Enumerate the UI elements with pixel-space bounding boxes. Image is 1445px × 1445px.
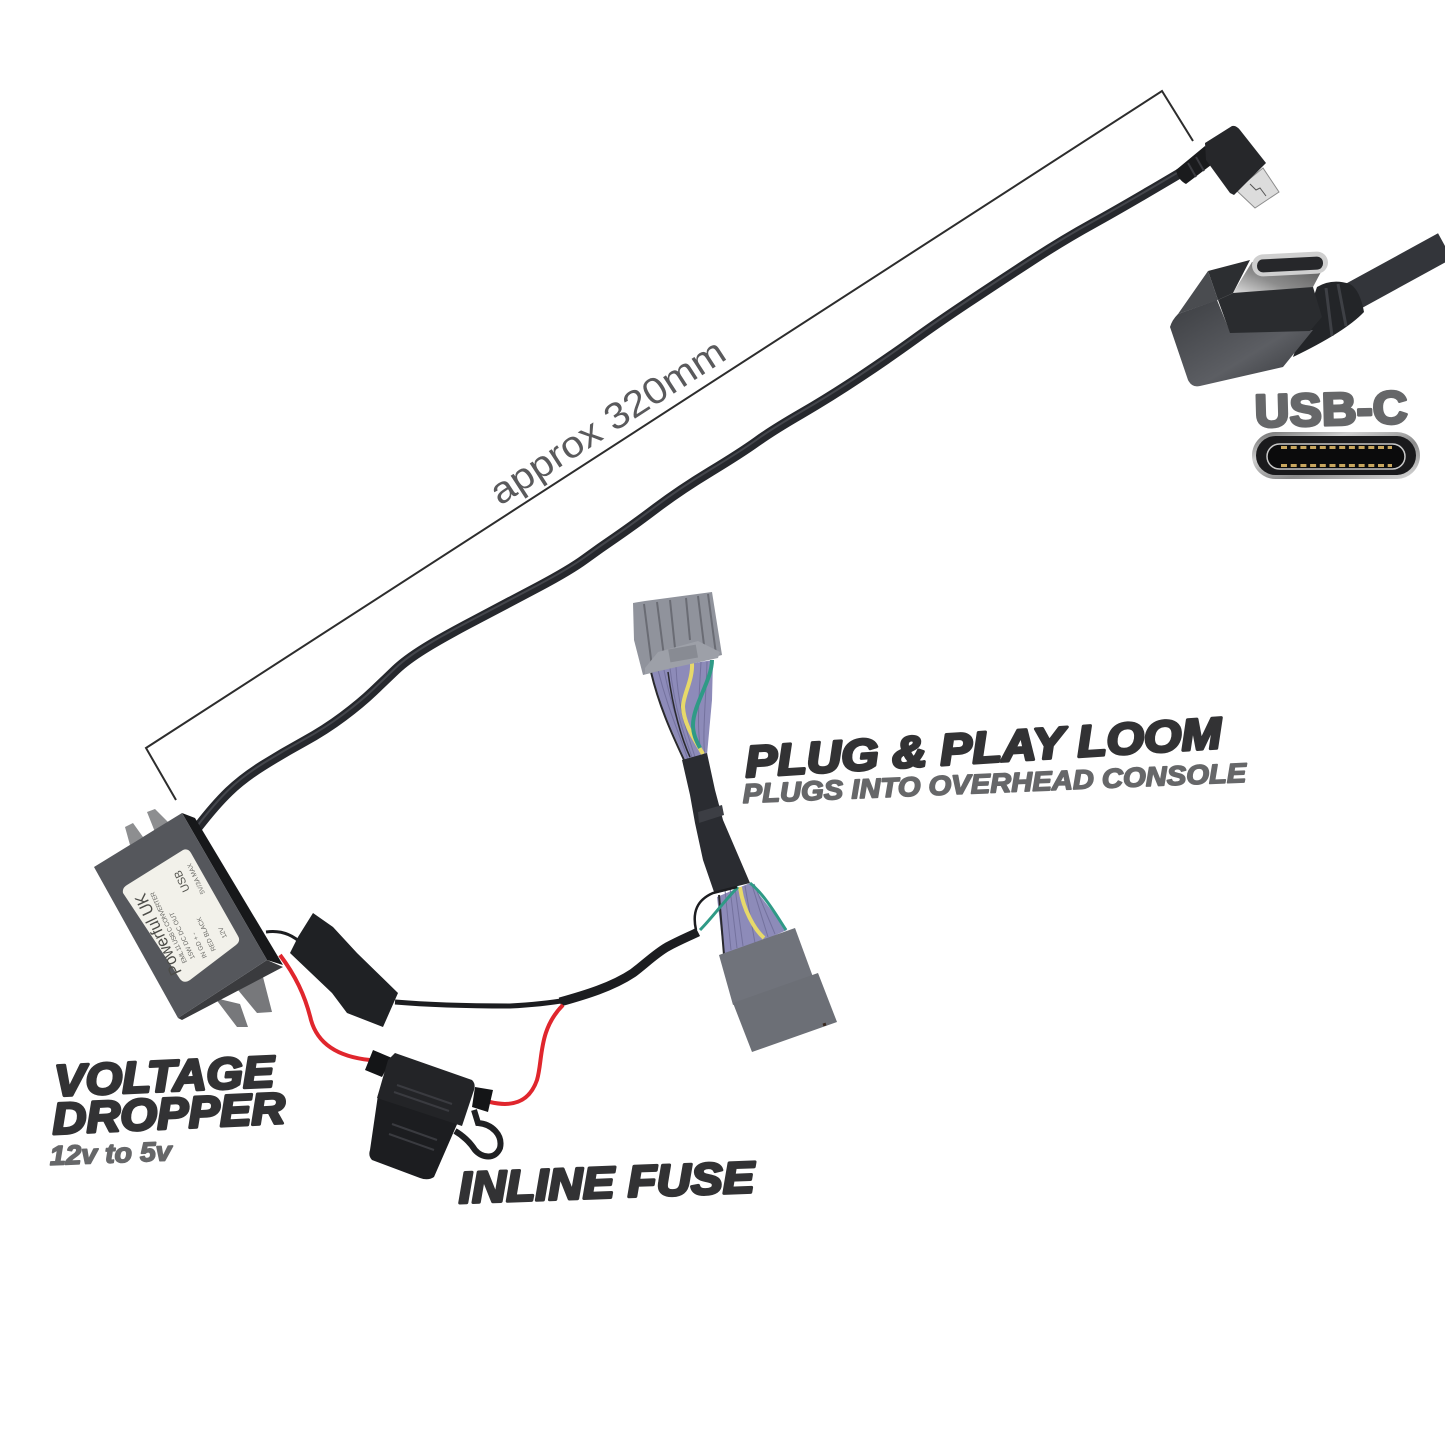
heading: voltage dropper: VOLTAGE xyxy=(53,1047,277,1106)
label text: 5V/3A MAX xyxy=(186,861,207,895)
top face xyxy=(94,813,267,1018)
left cap xyxy=(365,1050,392,1077)
side black face xyxy=(182,813,283,965)
label text: RED BLACK xyxy=(196,915,218,952)
heat-shrink block xyxy=(290,913,398,1027)
white label xyxy=(123,849,239,982)
upper body xyxy=(377,1053,475,1126)
upper wire bundle xyxy=(650,660,713,760)
heading: plug & play loom: PLUG & PLAY LOOM xyxy=(744,709,1224,787)
bottom edge face xyxy=(178,960,283,1020)
dimension bracket xyxy=(146,91,1193,800)
plug back face xyxy=(1208,260,1250,300)
voltage dropper module xyxy=(94,809,283,1027)
green wire top xyxy=(693,660,712,748)
label text: EML 11 USB C CONVERTER xyxy=(149,890,189,964)
inline fuse holder xyxy=(365,1050,500,1179)
red fused wire xyxy=(280,955,563,1104)
lower cover xyxy=(369,1095,458,1179)
label: USB-C: USB-C xyxy=(1254,381,1408,437)
label text: USB xyxy=(172,868,193,894)
plug dark band xyxy=(1218,287,1322,333)
yellow wire bottom xyxy=(740,887,764,938)
right cap xyxy=(472,1087,493,1112)
black power wire xyxy=(395,887,737,1006)
icon: USB-C port xyxy=(1252,432,1420,479)
strain relief xyxy=(1293,282,1364,357)
black wires into heat-shrink xyxy=(266,932,302,944)
strain relief xyxy=(1176,146,1215,184)
heading: voltage dropper: DROPPER xyxy=(51,1084,286,1144)
subheading: plugs into overhead console: PLUGS INTO OVERHEAD CONSOLE xyxy=(742,758,1248,809)
thick cable xyxy=(1350,246,1445,298)
black tape wrap xyxy=(682,753,750,892)
lower wire bundle xyxy=(717,883,787,958)
connector body xyxy=(1205,126,1266,195)
heading: voltage dropper xyxy=(51,1047,286,1144)
long black USB cable xyxy=(198,170,1182,827)
label text: 15W DC DC OUT xyxy=(169,911,197,960)
yellow wire top xyxy=(683,663,703,754)
label text: Powerful UK xyxy=(131,890,186,978)
large USB-C connector close-up xyxy=(1170,246,1445,386)
dimension label: approx 320mm: approx 320mm xyxy=(482,331,733,513)
small right-angle USB-C connector xyxy=(1176,126,1279,208)
label text: 12V xyxy=(217,925,229,939)
subheading: 12v to 5v: 12v to 5v xyxy=(49,1136,174,1171)
green wire bottom xyxy=(750,883,786,930)
metal tongue xyxy=(1233,262,1322,300)
plug and play loom xyxy=(633,592,837,1052)
gold pins xyxy=(1281,446,1392,449)
label text: IN GD + - xyxy=(191,931,209,959)
heading: inline fuse: INLINE FUSE xyxy=(458,1153,757,1213)
metal shell opening xyxy=(1251,251,1329,277)
metal tip xyxy=(1236,168,1279,208)
plug lower face xyxy=(1170,300,1313,386)
retaining loop xyxy=(455,1110,500,1156)
label text xyxy=(131,861,229,978)
lower connector xyxy=(719,928,813,1005)
top connector xyxy=(633,592,722,675)
mounting tabs xyxy=(125,823,143,845)
